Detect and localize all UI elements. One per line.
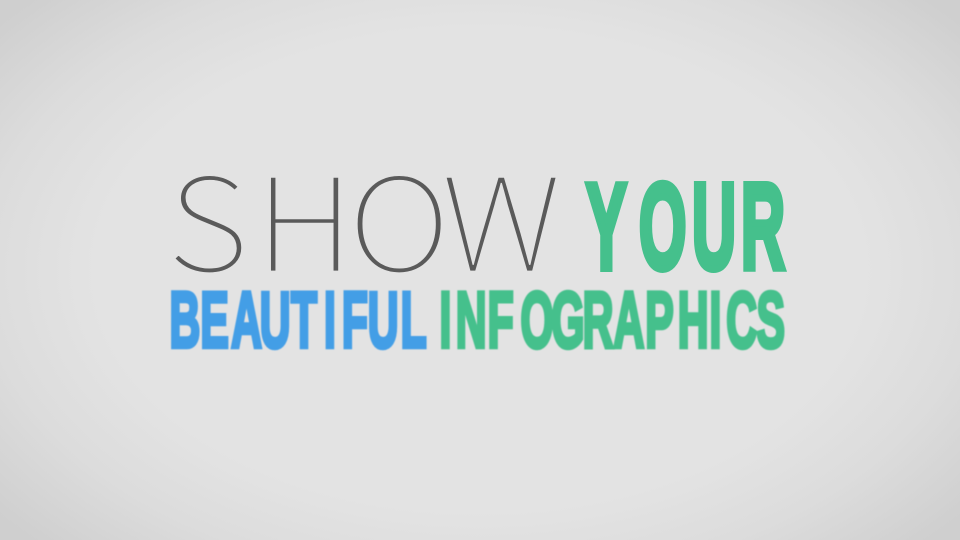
subhead word: BEAUTIFUL: BEAUTIFUL [170,277,427,364]
headline word: YOUR: YOUR [586,160,785,295]
subhead line [170,277,785,364]
headline word: SHOW: SHOW [168,123,561,309]
subhead word: INFOGRAPHICS: INFOGRAPHICS [440,277,785,364]
